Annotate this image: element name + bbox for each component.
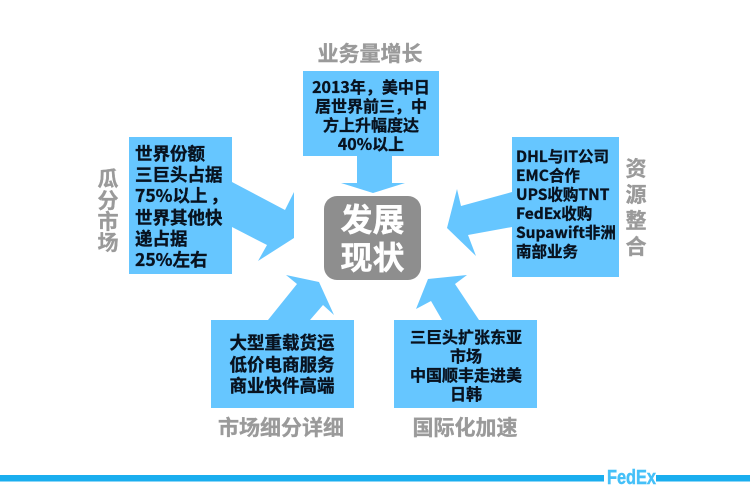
text: market share: 75%以上， xyxy=(135,183,228,208)
panel: business growth xyxy=(303,71,439,193)
text: market share: 世界份额 xyxy=(135,141,205,166)
centre title: 发展 xyxy=(340,195,405,241)
centre box xyxy=(324,195,421,280)
text: resource integration: Supawift非洲 xyxy=(516,221,616,243)
centre title: 现状 xyxy=(340,233,405,279)
panel: internationalisation xyxy=(394,275,537,408)
heading: resource integration vertical: 整 xyxy=(626,205,646,235)
text: resource integration: UPS收购TNT xyxy=(516,183,610,205)
text: business growth: 居世界前三，中 xyxy=(315,93,427,117)
text: market segmentation: 商业快件高端 xyxy=(230,373,334,398)
arrow: right box to centre xyxy=(447,189,512,256)
text: resource integration: FedEx收购 xyxy=(516,202,592,224)
heading: market share vertical: 市 xyxy=(98,206,118,236)
heading: resource integration vertical: 合 xyxy=(626,231,646,261)
text: resource integration: EMC合作 xyxy=(516,164,580,186)
panel: market share xyxy=(129,137,294,274)
text: internationalisation: 三巨头扩张东亚 xyxy=(410,324,522,348)
heading: internationalisation: 国际化加速 xyxy=(412,412,518,442)
footer logo: FedEx xyxy=(607,467,656,489)
text: market share: 三巨头占据 xyxy=(135,162,222,187)
text: market share: 世界其他快 xyxy=(135,205,223,230)
text: resource integration: DHL与IT公司 xyxy=(516,145,609,167)
heading: resource integration vertical: 资 xyxy=(626,153,646,183)
text: business growth: 40%以上 xyxy=(338,131,404,155)
panel: resource integration xyxy=(447,137,619,277)
heading: market share vertical: 瓜 xyxy=(98,163,118,193)
heading: market share vertical: 分 xyxy=(98,185,118,215)
text: market segmentation: 低价电商服务 xyxy=(230,352,334,377)
heading: market segmentation: 市场细分详细 xyxy=(218,412,344,442)
text: business growth: 2013年，美中日 xyxy=(312,74,430,98)
arrow: lower-right box to centre xyxy=(416,275,479,320)
text: internationalisation: 日韩 xyxy=(450,381,482,405)
footer line xyxy=(0,475,750,482)
text: resource integration: 南部业务 xyxy=(516,240,579,262)
arrow: lower-left box to centre xyxy=(268,275,334,320)
text: business growth: 方上升幅度达 xyxy=(323,112,419,136)
panel: market segmentation xyxy=(211,275,354,408)
arrow: top box to centre xyxy=(341,156,405,193)
text: market segmentation: 大型重载货运 xyxy=(230,330,335,355)
text: market share: 25%左右 xyxy=(135,247,208,272)
text: internationalisation: 市场 xyxy=(450,343,482,367)
heading: business growth: 业务量增长 xyxy=(318,38,422,68)
arrow: left box to centre xyxy=(232,182,294,261)
text: internationalisation: 中国顺丰走进美 xyxy=(410,362,522,386)
heading: market share vertical: 场 xyxy=(98,227,118,257)
text: market share: 递占据 xyxy=(135,226,188,251)
heading: resource integration vertical: 源 xyxy=(626,179,646,209)
